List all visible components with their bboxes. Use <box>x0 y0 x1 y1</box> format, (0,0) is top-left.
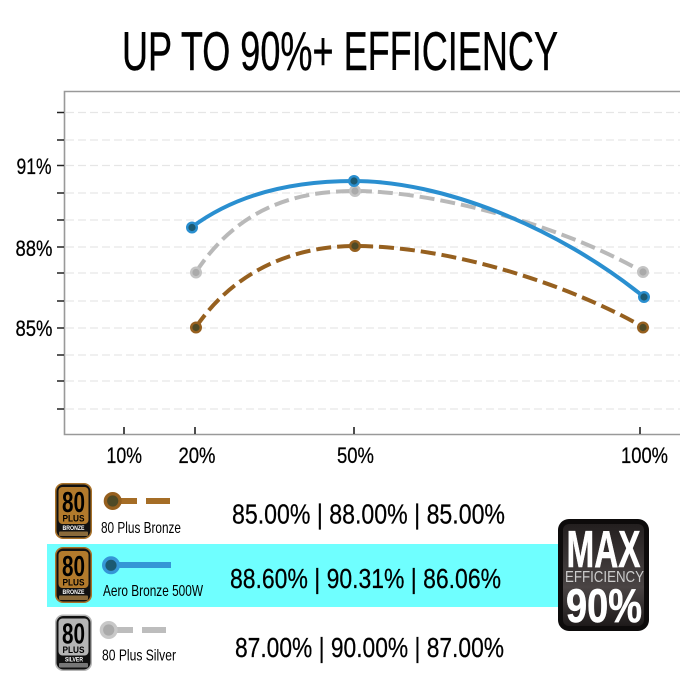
y axis labels: 88% <box>16 236 52 261</box>
line chart <box>16 92 680 468</box>
badge: max efficiency 90%: 90% <box>566 579 642 632</box>
x axis labels: 20% <box>178 443 216 468</box>
badge: 80 Plus Bronze: BRONZE <box>62 525 85 532</box>
row: 80 Plus Bronze <box>55 483 505 539</box>
x axis labels <box>106 443 668 468</box>
badge: Silver: SILVER <box>65 656 83 664</box>
series: Aero Bronze 500W <box>187 176 649 302</box>
values: 88.60% | 90.31% | 86.06% <box>230 563 501 594</box>
badge: max efficiency 90%: MAX <box>566 521 641 579</box>
y axis labels: 85% <box>16 316 52 341</box>
legend marker: silver <box>101 623 166 637</box>
x axis labels: 100% <box>621 443 668 468</box>
legend label: Aero Bronze 500W <box>103 583 204 600</box>
badge: 80 Plus Bronze: PLUS <box>62 514 84 524</box>
badge: Aero Bronze <box>55 547 92 603</box>
badge: Silver <box>55 614 92 671</box>
badge: Aero Bronze: BRONZE <box>62 589 85 596</box>
legend marker: aero <box>104 558 171 573</box>
badge: Aero Bronze: PLUS <box>62 578 84 588</box>
badge: Silver: 80 <box>62 618 85 650</box>
x axis labels: 10% <box>106 443 142 468</box>
row: 80 Plus Silver <box>55 614 504 671</box>
row: Aero Bronze 500W <box>55 547 501 603</box>
y axis labels <box>16 154 52 341</box>
highlight band <box>47 544 567 607</box>
values: 87.00% | 90.00% | 87.00% <box>235 632 504 663</box>
axis frame <box>64 92 680 434</box>
legend label: 80 Plus Silver <box>102 648 177 664</box>
badge: 80 Plus Bronze <box>55 483 92 539</box>
x axis labels: 50% <box>337 443 374 468</box>
legend label: 80 Plus Bronze <box>101 520 181 537</box>
badge: max efficiency 90%: EFFICIENCY <box>565 569 644 586</box>
series: 80 Plus Bronze <box>191 241 648 332</box>
x axis ticks <box>124 427 640 434</box>
badge: max efficiency 90% <box>558 519 649 632</box>
y axis labels: 91% <box>16 154 52 179</box>
y axis ticks <box>57 112 64 409</box>
legend marker: bronze <box>105 494 170 508</box>
badge: Aero Bronze: 80 <box>62 551 85 583</box>
series: 80 Plus Silver <box>191 186 648 277</box>
values: 85.00% | 88.00% | 85.00% <box>232 498 505 530</box>
badge: Silver: PLUS <box>62 645 84 656</box>
badge: 80 Plus Bronze: 80 <box>62 487 85 519</box>
